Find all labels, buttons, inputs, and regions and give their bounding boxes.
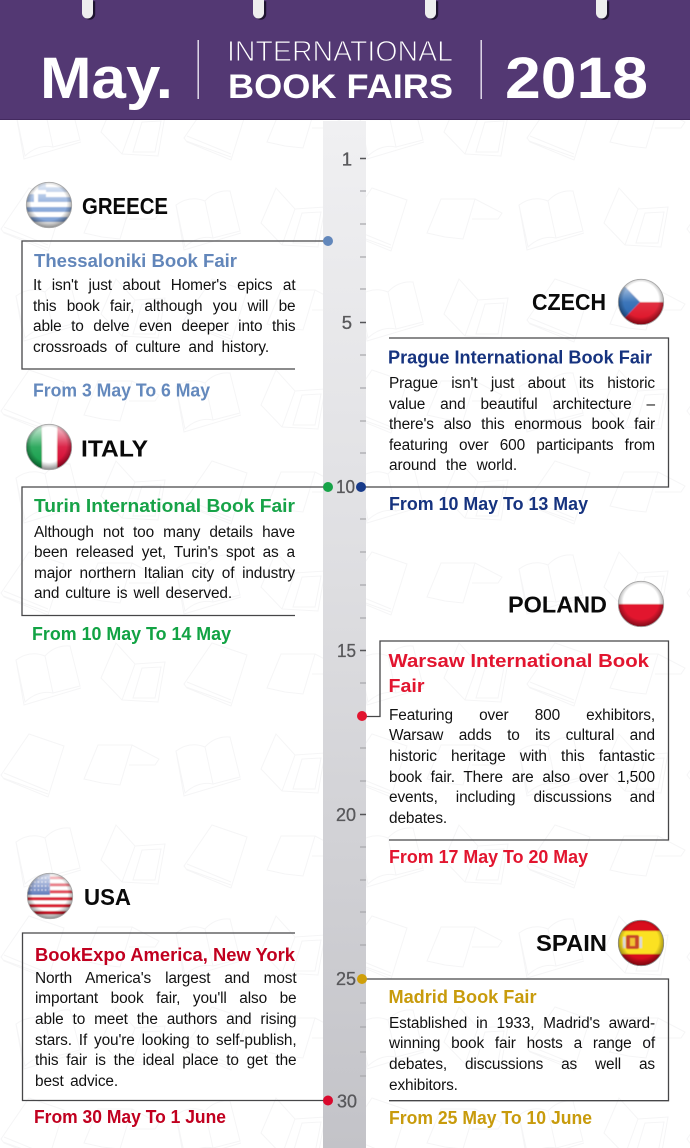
country name: CZECH bbox=[532, 289, 606, 315]
main title: BOOK FAIRS bbox=[228, 68, 453, 106]
icon: Spanish flag bbox=[618, 920, 664, 966]
description bbox=[34, 522, 304, 612]
fair name bbox=[388, 650, 650, 696]
description: around the world. bbox=[389, 457, 517, 474]
country name: ITALY bbox=[81, 436, 148, 462]
description bbox=[35, 969, 305, 1099]
description: there's also this enormous book fair bbox=[389, 416, 655, 433]
description: been released yet, Turin's spot as a bbox=[34, 544, 295, 561]
description: this book fair, although you will be bbox=[33, 298, 296, 315]
description: book fair. There are also over 1,500 bbox=[389, 769, 655, 786]
header banner bbox=[0, 0, 690, 120]
main title bbox=[227, 36, 453, 106]
panel: Poland bbox=[357, 579, 668, 867]
panel: USA bbox=[22, 871, 333, 1127]
icon: Polish flag bbox=[618, 580, 664, 628]
description: Warsaw adds to its cultural and bbox=[389, 727, 655, 744]
description: stars. If you're looking to self-publish, bbox=[35, 1032, 296, 1049]
description: Although not too many details have bbox=[34, 524, 295, 540]
description: debates, discussions as well as bbox=[389, 1056, 655, 1073]
description bbox=[33, 276, 303, 366]
country name: USA bbox=[84, 884, 131, 910]
dates: From 17 May To 20 May bbox=[389, 847, 588, 867]
day numbers: 30 bbox=[337, 1090, 357, 1112]
panel: Spain bbox=[357, 918, 668, 1128]
callout box and connector bbox=[361, 338, 668, 487]
description bbox=[389, 1014, 664, 1104]
fair name: Prague International Book Fair bbox=[388, 346, 652, 368]
description: debates. bbox=[389, 810, 447, 827]
callout box and connector bbox=[22, 241, 328, 369]
country name: GREECE bbox=[82, 193, 168, 219]
description: this fair is the ideal place to get the bbox=[35, 1052, 296, 1069]
fair name: BookExpo America, New York bbox=[35, 944, 296, 965]
description: North America's largest and most bbox=[35, 970, 296, 987]
dates: From 10 May To 13 May bbox=[389, 494, 588, 514]
day numbers: 10 bbox=[336, 476, 355, 497]
day ticks bbox=[360, 191, 366, 1076]
description: It isn't just about Homer's epics at bbox=[33, 277, 296, 294]
description: featuring over 600 participants from bbox=[389, 437, 655, 454]
description: able to meet the authors and rising bbox=[35, 1011, 296, 1028]
fair name: Fair bbox=[388, 675, 424, 696]
description: Featuring over 800 exhibitors, bbox=[389, 707, 655, 724]
description: best advice. bbox=[35, 1073, 118, 1090]
callout box and connector bbox=[362, 979, 668, 1101]
description: and culture is well deserved. bbox=[34, 585, 232, 602]
panel: Czech bbox=[356, 277, 668, 514]
day numbers: 20 bbox=[336, 804, 356, 825]
day numbers bbox=[336, 148, 357, 1112]
description: Established in 1933, Madrid's award- bbox=[389, 1015, 655, 1032]
panel: Italy bbox=[22, 422, 333, 644]
binder rings bbox=[82, 0, 609, 20]
day numbers: 1 bbox=[342, 148, 352, 170]
callout box and connector bbox=[22, 487, 328, 616]
icon: Italian flag bbox=[26, 424, 72, 470]
day numbers: 25 bbox=[336, 968, 356, 989]
day numbers: 15 bbox=[337, 640, 356, 661]
icon: Czech flag bbox=[618, 278, 664, 326]
country name: SPAIN bbox=[536, 930, 607, 956]
description: winning book fair hosts a range of bbox=[389, 1035, 655, 1052]
callout box and connector bbox=[22, 933, 328, 1100]
icon: Greek flag bbox=[26, 182, 72, 228]
description: historic heritage with this fantastic bbox=[389, 748, 655, 765]
icon: US flag bbox=[26, 872, 74, 920]
description: crossroads of culture and history. bbox=[33, 339, 269, 356]
main title: INTERNATIONAL bbox=[227, 36, 453, 68]
fair name: Turin International Book Fair bbox=[34, 495, 295, 516]
day numbers: 5 bbox=[342, 312, 352, 333]
description: major northern Italian city of industry bbox=[34, 565, 295, 582]
description bbox=[389, 706, 664, 836]
fair name: Warsaw International Book bbox=[388, 650, 650, 671]
dates: From 25 May To 10 June bbox=[389, 1108, 592, 1128]
description: exhibitors. bbox=[389, 1077, 458, 1094]
year: 2018 bbox=[505, 46, 648, 111]
dates: From 30 May To 1 June bbox=[34, 1107, 226, 1127]
timeline column bbox=[323, 121, 366, 1148]
dates: From 10 May To 14 May bbox=[32, 624, 231, 644]
panel: Greece bbox=[22, 180, 333, 400]
fair name: Madrid Book Fair bbox=[388, 986, 536, 1007]
description: events, including discussions and bbox=[389, 789, 655, 806]
description: Prague isn't just about its historic bbox=[389, 375, 655, 392]
country name: POLAND bbox=[508, 592, 607, 618]
description: value and beautiful architecture – bbox=[389, 396, 655, 413]
fair name: Thessaloniki Book Fair bbox=[34, 250, 237, 271]
description bbox=[389, 374, 664, 484]
description: able to delve even deeper into this bbox=[33, 318, 296, 335]
month title: May. bbox=[40, 46, 173, 111]
description: important book fair, you'll also be bbox=[35, 990, 296, 1007]
dates: From 3 May To 6 May bbox=[33, 380, 210, 400]
callout box and connector bbox=[362, 641, 668, 840]
